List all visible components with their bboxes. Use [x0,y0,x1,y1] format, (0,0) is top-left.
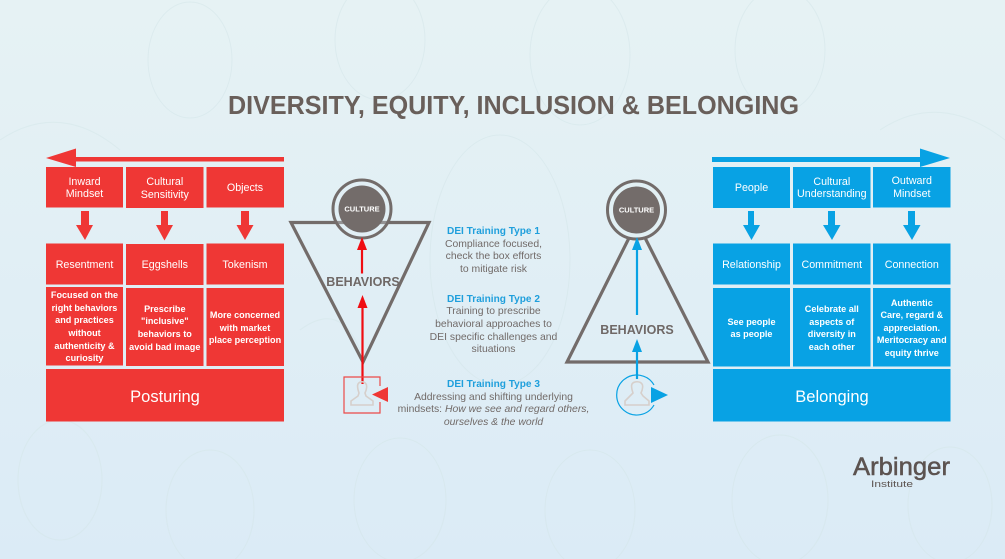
icon: culture circle: CULTURE [344,204,380,214]
text box: authentic care: Meritocracy and [877,335,947,345]
panel: belonging [712,148,950,422]
text: type 1 [445,226,542,275]
box: resentment: Resentment [56,259,113,271]
text box: authentic care: appreciation. [883,323,940,333]
box: belonging: Belonging [795,388,869,406]
box: people [713,167,790,208]
text box: celebrate all aspects: Celebrate all [805,304,859,314]
text box: see people as people: as people [731,329,772,339]
box: commitment [793,244,870,284]
box: people: People [735,182,768,194]
arrow: down 3 [236,211,254,240]
text: type 2: DEI Training Type 2 [447,294,540,305]
panel: posturing [46,148,284,422]
text: type 3: ourselves & the world [444,417,544,428]
box: objects: Objects [227,182,263,194]
box: posturing [46,369,284,422]
diagram: upright triangle culture and behaviors [567,181,708,415]
text column: DEI training types [398,226,589,428]
arrow: down 2 [156,211,173,240]
diagram: inverted triangle culture and behaviors [291,180,429,413]
box: objects [206,167,284,208]
text: type 3: mindsets: How we see and regard others, [398,404,589,415]
text: type 1: check the box efforts [446,251,541,262]
text box: celebrate all aspects: aspects of [809,317,855,327]
icon: culture circle: CULTURE [619,206,654,214]
text box: celebrate all aspects: each other [809,342,855,352]
box: connection [873,244,950,284]
arrow: rightward blue [712,148,950,167]
box: inward mindset [46,167,123,208]
text box: prescribe inclusive behaviors: behaviors to [138,329,192,339]
text box: prescribe inclusive behaviors: "inclusive" [141,316,189,326]
arrow: red lower [361,306,364,384]
box: tokenism [206,244,284,284]
arrow: down 2 [823,211,840,240]
box: cultural understanding: Cultural [813,176,850,188]
text: type 2: situations [472,344,515,355]
arrow: blue upper [636,248,638,315]
box: eggshells [126,244,204,285]
icon: person in circle [617,375,668,415]
text box: authentic care: Authentic [891,298,933,308]
text box: authentic care: equity thrive [885,348,939,358]
text box: market place perception: with market [219,323,270,333]
text: type 2: DEI specific challenges and [430,332,558,343]
arrow: down 1 [743,211,760,240]
text: type 3 [398,379,589,428]
text: type 3: Addressing and shifting underlying [414,392,573,403]
text box: see people as people: See people [727,317,776,327]
text box: prescribe inclusive behaviors: Prescribe [144,304,186,314]
box: tokenism: Tokenism [222,259,268,271]
triangle: upright [567,222,708,362]
box: outward mindset: Outward [892,175,932,187]
arrow: blue lower [636,350,638,379]
arrow: down 1 [76,211,93,240]
box: relationship: Relationship [722,259,781,271]
icon: culture circle [608,181,666,239]
logo: Arbinger Institute: Institute [871,479,913,489]
arrow: red upper [361,248,363,274]
box: cultural sensitivity [126,167,204,208]
text: type 1: DEI Training Type 1 [447,226,540,237]
box: commitment: Commitment [802,259,862,271]
box: posturing: Posturing [130,388,200,406]
text box: market place perception [206,288,284,366]
text box: prescribe inclusive behaviors: avoid bad image [129,342,200,352]
box: connection: Connection [885,259,939,271]
box: cultural understanding [793,167,870,208]
icon: culture circle [333,180,391,238]
arrow: leftward red [46,148,284,167]
text box: authentic care [873,288,950,366]
text box: celebrate all aspects [793,288,870,366]
text: type 2: behavioral approaches to [435,319,552,330]
box: cultural sensitivity: Sensitivity [141,189,190,201]
text box: focused on the right behaviors: curiosity [66,353,104,363]
text box: focused on the right behaviors [46,287,123,366]
label: behaviors: BEHAVIORS [326,275,400,289]
text box: focused on the right behaviors: and practices [55,315,114,325]
box: relationship [713,244,790,284]
arrow: down 3 [903,211,920,240]
text box: authentic care: Care, regard & [880,310,944,320]
logo: Arbinger Institute: Arbinger [853,453,950,481]
text box: see people as people [713,288,790,366]
triangle: inverted [291,222,429,362]
text box: market place perception: place perception [209,335,281,345]
text box: focused on the right behaviors: right behaviors [52,303,117,313]
box: cultural sensitivity: Cultural [146,176,183,188]
box: outward mindset [873,167,950,208]
text: type 2 [430,294,558,355]
title: DIVERSITY, EQUITY, INCLUSION & BELONGING [228,92,799,120]
box: eggshells: Eggshells [142,259,188,271]
text box: market place perception: More concerned [210,310,280,320]
text box: focused on the right behaviors: without [67,328,101,338]
text box: celebrate all aspects: diversity in [808,329,856,339]
box: inward mindset: Mindset [66,188,103,200]
text: type 1: to mitigate risk [460,264,528,275]
box: resentment [46,244,123,284]
text box: focused on the right behaviors: authenticity & [54,341,115,351]
text box: prescribe inclusive behaviors [126,288,204,366]
box: inward mindset: Inward [68,176,101,188]
text: type 2: Training to prescribe [446,306,541,317]
box: cultural understanding: Understanding [797,188,867,200]
icon: person in square [344,377,388,413]
text: type 3: DEI Training Type 3 [447,379,540,390]
box: outward mindset: Mindset [893,188,931,200]
label: behaviors: BEHAVIORS [600,323,674,337]
text box: focused on the right behaviors: Focused on the [51,290,118,300]
text: type 1: Compliance focused, [445,239,542,250]
box: belonging [713,369,950,422]
